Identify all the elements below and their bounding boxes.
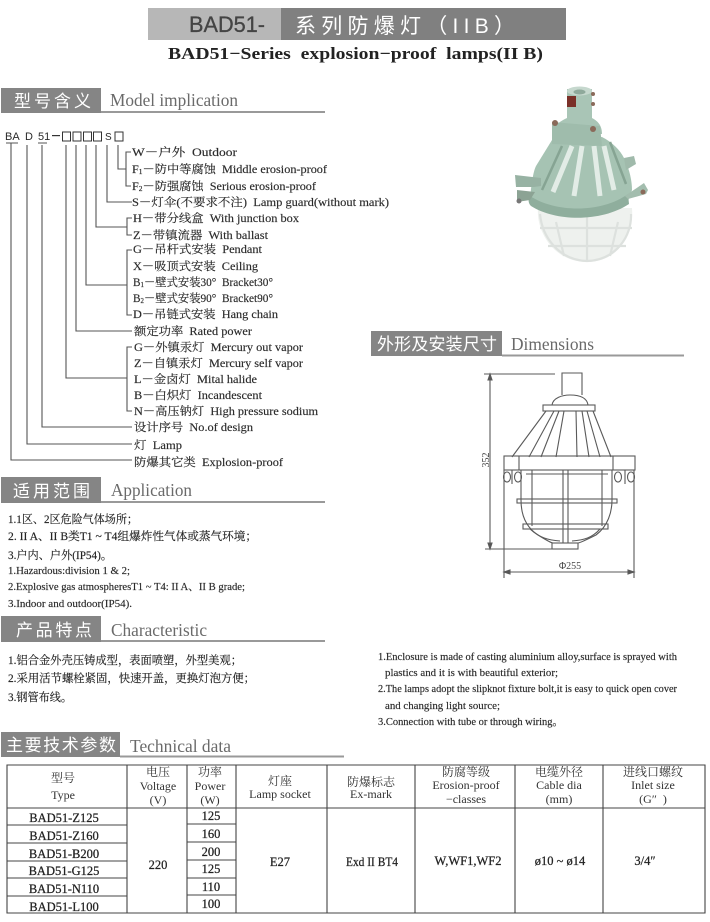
table header row: Ex-mark: [350, 787, 392, 801]
table header row: 进线口螺纹: [623, 764, 683, 779]
table type column: BAD51-G125: [29, 864, 99, 878]
table power column: 160: [202, 827, 220, 841]
option labels: －防强腐蚀 Serious erosion-proof: [143, 179, 316, 193]
table merged values: 220: [149, 858, 167, 872]
option labels: S－灯伞(不要求不注) Lamp guard(without mark): [132, 195, 389, 209]
table header row: (mm): [546, 792, 572, 806]
text block: application list: 3.户内、户外(IP54)。: [8, 548, 112, 562]
table power column: 110: [202, 880, 220, 894]
option labels: 1: [139, 168, 143, 176]
cage and glass: [538, 208, 632, 262]
title banner: BAD51-: [189, 12, 265, 37]
table header row: 电缆外径: [535, 764, 583, 779]
option labels: F: [132, 164, 138, 176]
option labels: G－外镇汞灯 Mercury out vapor: [134, 340, 303, 354]
table header row: 型号: [51, 770, 75, 785]
table type column: BAD51-Z125: [29, 811, 99, 825]
text block: characteristic list (English): and changing light source;: [385, 701, 500, 712]
table power column: [202, 809, 220, 911]
model code string: BA: [5, 131, 20, 143]
option labels: B: [133, 293, 141, 305]
cone body with fins: [530, 137, 632, 213]
table header row: 电压: [146, 764, 170, 779]
heading: technical data: 主要技术参数: [6, 736, 116, 755]
option labels: D－吊链式安装 Hang chain: [133, 307, 278, 321]
heading: model implication: 型号含义: [14, 92, 91, 111]
subtitle: BAD51−Series explosion−proof lamps(II B): [168, 44, 543, 63]
table merged values: 3/4″: [634, 854, 656, 868]
heading: technical data: [1, 732, 344, 758]
option labels: 额定功率 Rated power: [134, 324, 252, 338]
option labels: H－带分线盒 With junction box: [133, 211, 299, 225]
model code string: [5, 131, 123, 143]
dimension text: diameter: Φ255: [559, 561, 581, 572]
text block: characteristic list (English): 3.Connection with tube or through wiring。: [378, 717, 563, 728]
option labels: [132, 145, 389, 469]
heading: characteristic: 产品特点: [16, 621, 92, 640]
table power column: 125: [202, 862, 220, 876]
option labels: 2: [141, 297, 144, 305]
title banner: [148, 8, 566, 40]
option labels: B－白炽灯 Incandescent: [134, 388, 263, 402]
table header row: (V): [150, 793, 166, 807]
table header row: Power: [195, 779, 225, 793]
heading: dimensions: [371, 331, 684, 356]
text block: characteristic list (English): plastics and it is with beautiful exterior;: [385, 668, 558, 679]
technical data table: [7, 764, 705, 914]
lamp outline: [504, 373, 635, 549]
model code string: S: [105, 132, 112, 143]
table grid: [7, 765, 705, 913]
option labels: F: [132, 181, 138, 193]
dimension text: height: 352: [481, 452, 492, 468]
option labels: 防爆其它类 Explosion-proof: [134, 455, 283, 469]
lower ring: [529, 194, 629, 218]
table header row: (W): [200, 793, 220, 807]
heading: technical data: Technical data: [130, 736, 231, 756]
text block: characteristic list (Chinese): 3.钢管布线。: [8, 690, 72, 704]
heading: characteristic: [1, 616, 325, 642]
option labels: X－吸顶式安装 Ceiling: [133, 259, 258, 273]
table merged values: ø10 ~ ø14: [535, 854, 586, 868]
table header row: Type: [51, 788, 75, 802]
table header row: Voltage: [140, 779, 176, 793]
text block: characteristic list (Chinese): 1.铝合金外壳压铸成型，表面喷塑，外型美观；: [8, 653, 242, 667]
option labels: Z－自镇汞灯 Mercury self vapor: [134, 356, 303, 370]
option labels: N－高压钠灯 High pressure sodium: [134, 404, 318, 418]
text block: application list: 1.1区、2区危险气体场所；: [8, 512, 138, 526]
lamp product photo: [515, 86, 648, 262]
text block: application list: 2.Explosive gas atmospheresT1 ~ T4: II A、II B grade;: [8, 582, 245, 593]
table merged values: W,WF1,WF2: [435, 854, 501, 868]
table merged values: Exd II BT4: [346, 855, 399, 869]
heading: application: Application: [111, 480, 192, 500]
text block: characteristic list (English): 1.Enclosure is made of casting aluminium alloy,surface is sprayed with: [378, 652, 678, 663]
table header row: Inlet size: [631, 778, 675, 792]
dimension drawing: [481, 373, 635, 578]
option labels: L－金卤灯 Mital halide: [134, 372, 257, 386]
table header row: 灯座: [268, 773, 292, 788]
heading: application: [1, 477, 325, 503]
table type column: BAD51-B200: [29, 847, 99, 861]
table header row: Lamp socket: [249, 787, 311, 801]
heading: application: 适用范围: [13, 482, 90, 501]
model code string: D: [25, 131, 33, 143]
option labels: W－户外 Outdoor: [132, 145, 237, 159]
panel: model code diagram: [5, 131, 389, 469]
table power column: 125: [202, 809, 220, 823]
option labels: －壁式安装90° Bracket90°: [144, 291, 273, 305]
table header row: 防爆标志: [347, 774, 396, 789]
title banner: 系列防爆灯（IIB）: [295, 15, 515, 38]
table header row: [51, 764, 683, 807]
neck: [552, 89, 602, 134]
model code string: 51: [38, 131, 50, 143]
text block: application list: [8, 512, 257, 610]
text block: application list: 2. II A、II B类T1 ~ T4组爆炸性气体或蒸气环境；: [8, 529, 257, 543]
text block: application list: 3.Indoor and outdoor(IP54).: [8, 599, 132, 610]
heading: model implication: [1, 88, 325, 113]
table type column: [29, 811, 99, 914]
option labels: －防中等腐蚀 Middle erosion-proof: [143, 162, 327, 176]
heading: characteristic: Characteristic: [111, 620, 207, 640]
clamps: [515, 175, 541, 187]
option labels: 2: [139, 185, 143, 193]
table header row: (G″ ): [639, 792, 667, 806]
option labels: 灯 Lamp: [134, 438, 182, 452]
text block: characteristic list (Chinese): 2.采用活节螺栓紧固，快速开盖，更换灯泡方便；: [8, 671, 255, 685]
table power column: 200: [202, 845, 220, 859]
connector lines: [6, 143, 132, 460]
table header row: Cable dia: [536, 778, 582, 792]
heading: dimensions: Dimensions: [511, 334, 594, 354]
text block: application list: 1.Hazardous:division 1 & 2;: [8, 566, 130, 577]
text block: characteristic list (Chinese): [8, 653, 255, 704]
text block: characteristic list (English): [378, 652, 678, 728]
table power column: 100: [202, 897, 220, 911]
option labels: G－吊杆式安装 Pendant: [133, 242, 263, 256]
collar: [552, 122, 602, 146]
dimension lines: [484, 374, 634, 578]
option labels: Z－带镇流器 With ballast: [133, 228, 269, 242]
table type column: BAD51-N110: [29, 882, 99, 896]
table header row: −classes: [446, 792, 486, 806]
table merged values: E27: [270, 855, 290, 869]
heading: model implication: Model implication: [110, 90, 238, 110]
option labels: B: [133, 277, 141, 289]
option labels: 设计序号 No.of design: [134, 420, 253, 434]
table type column: BAD51-Z160: [29, 829, 99, 843]
table header row: 功率: [198, 764, 222, 779]
table header row: Erosion-proof: [432, 778, 500, 792]
table merged values: [149, 854, 656, 872]
table header row: 防腐等级: [442, 765, 490, 779]
heading: dimensions: 外形及安装尺寸: [377, 335, 497, 354]
table type column: BAD51-L100: [29, 900, 99, 914]
option labels: 1: [141, 281, 144, 289]
text block: characteristic list (English): 2.The lamps adopt the slipknot fixture bolt,it is easy to quick open cover: [378, 684, 677, 695]
option labels: －壁式安装30° Bracket30°: [144, 275, 273, 289]
